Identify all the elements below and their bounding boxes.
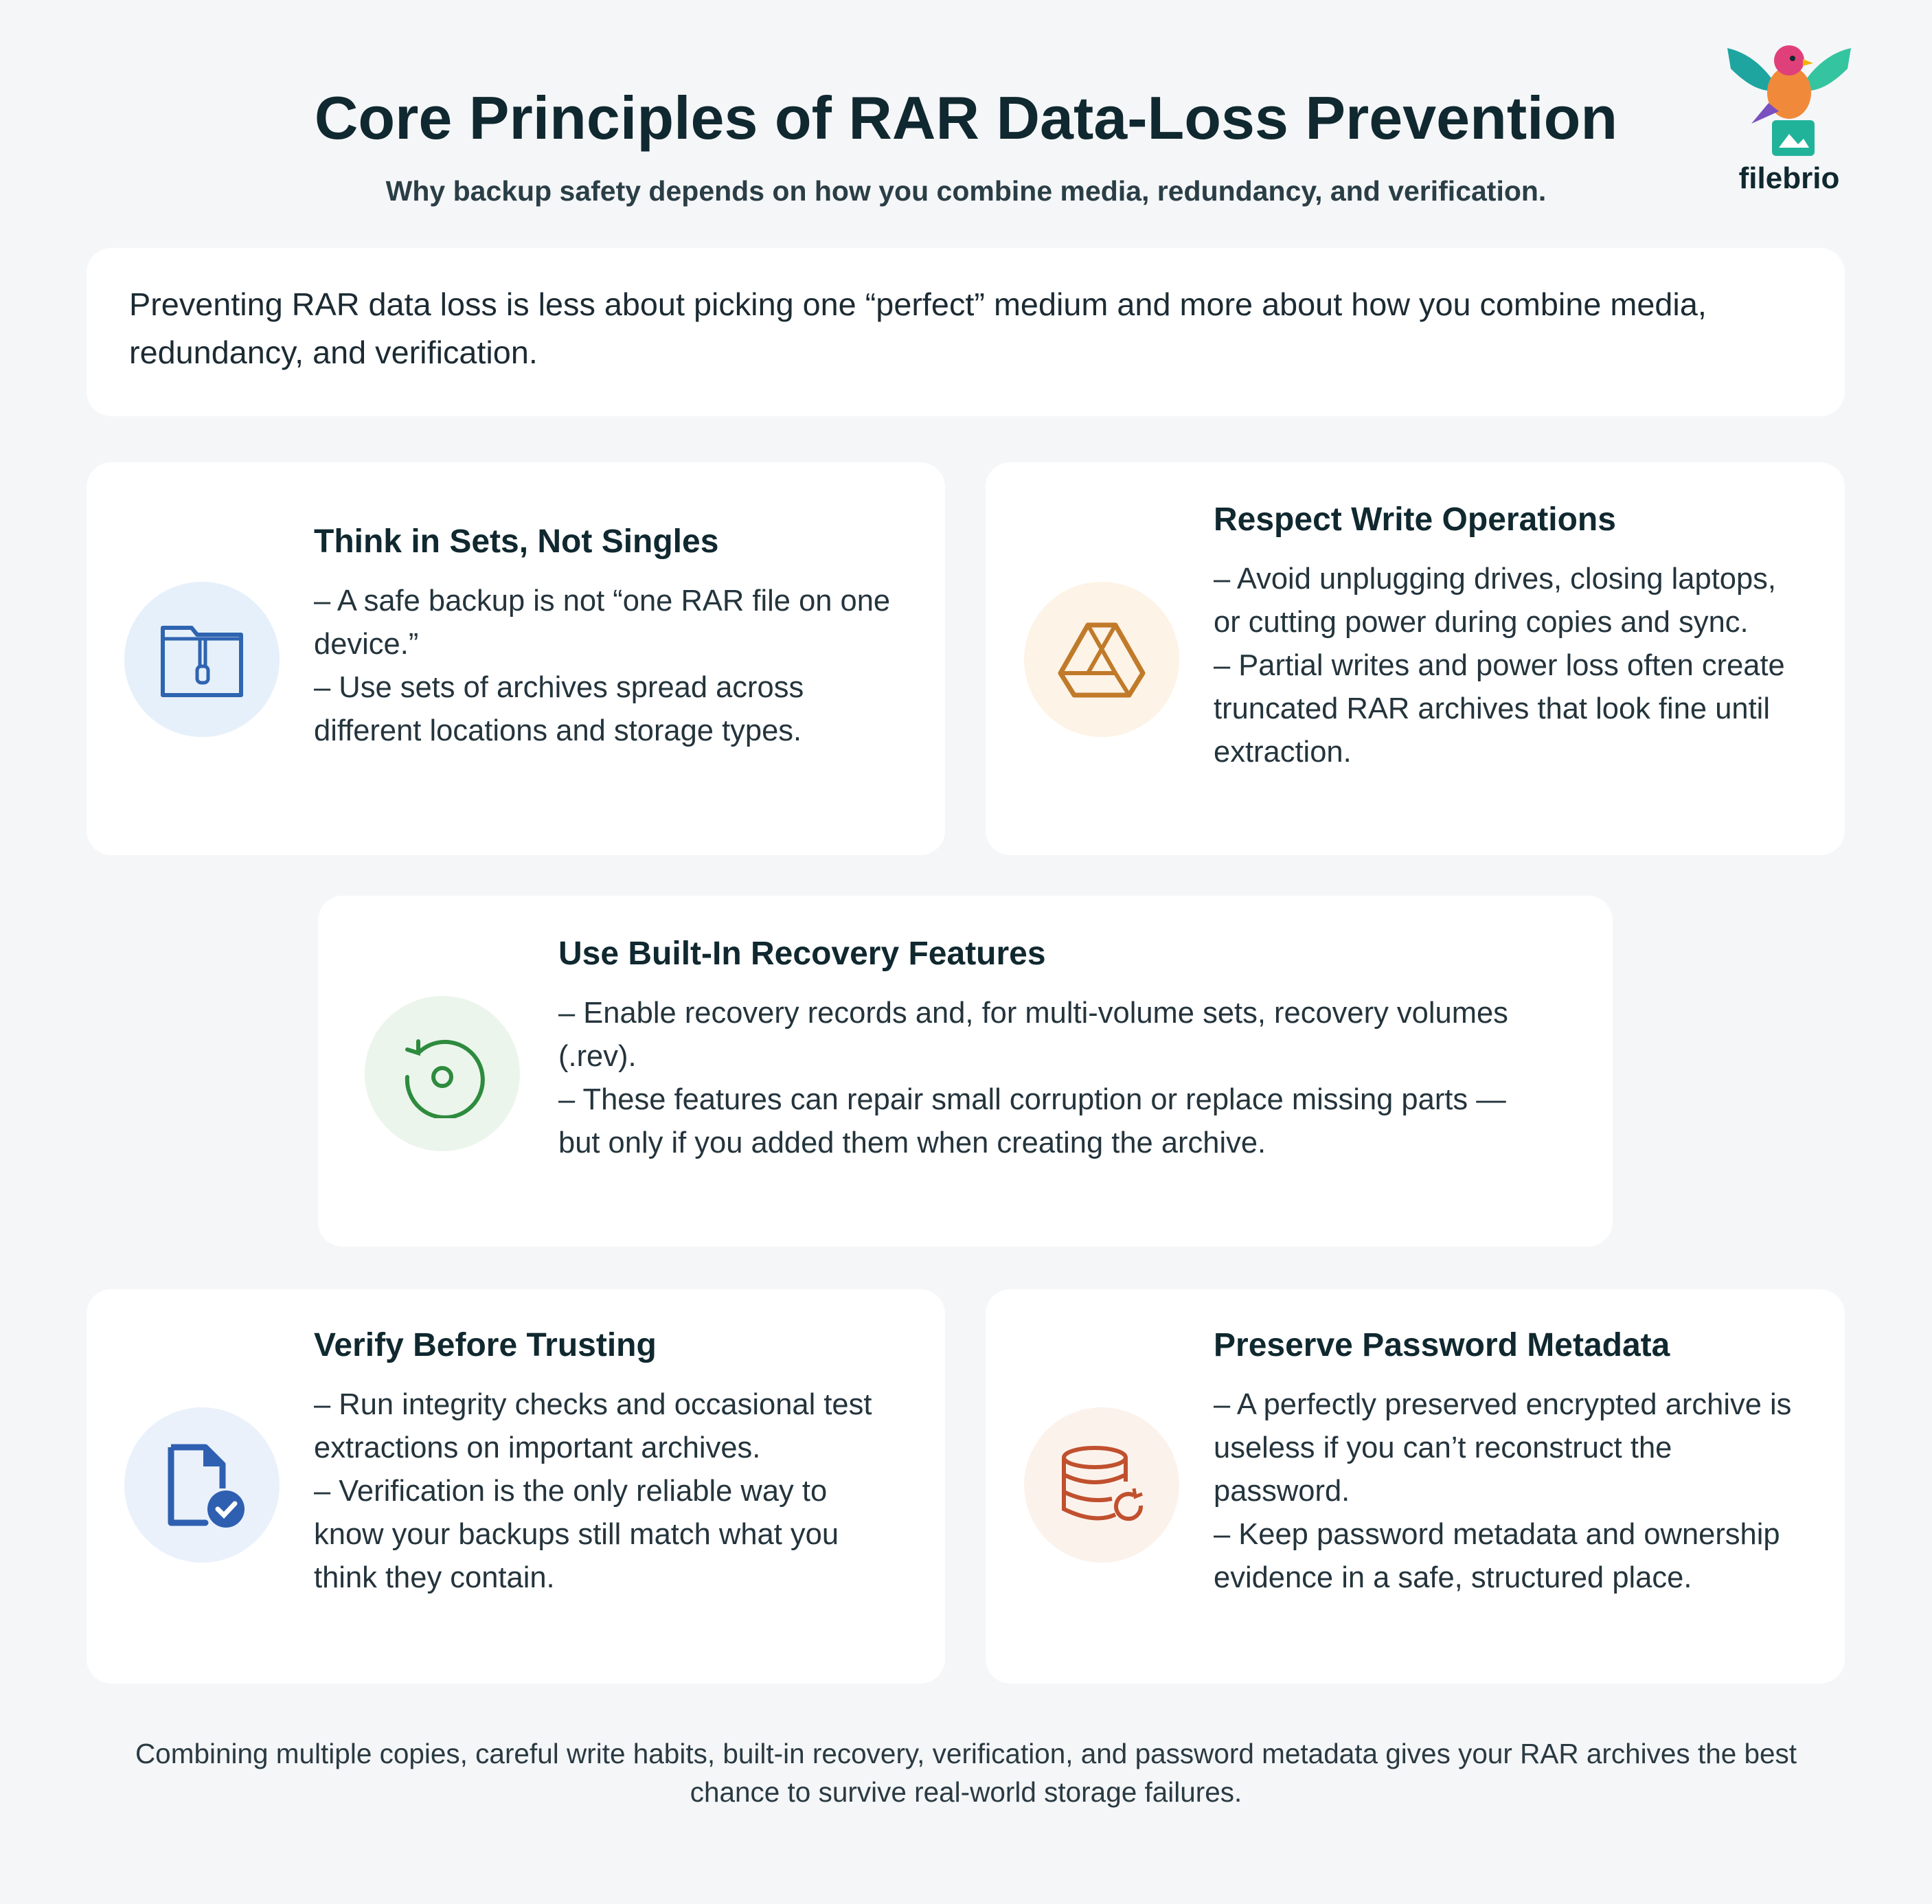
- text: recovery: but only if you added them when creating the archive.: [558, 1126, 1266, 1159]
- text: verify: – Run integrity checks and occasional test: [314, 1388, 872, 1421]
- text: verify: [314, 1327, 872, 1594]
- text: recovery: Use Built-In Recovery Features: [558, 936, 1046, 972]
- text: password: – Keep password metadata and ownership: [1214, 1518, 1780, 1551]
- text: respect write: extraction.: [1214, 736, 1352, 769]
- text: recovery: [558, 936, 1508, 1159]
- text: verify: Verify Before Trusting: [314, 1327, 657, 1363]
- text: think in sets: – A safe backup is not “one RAR file on one: [314, 585, 890, 617]
- text: respect write: – Partial writes and power loss often create: [1214, 649, 1785, 682]
- icon: zip folder: [124, 582, 280, 737]
- intro panel: redundancy, and verification.: [129, 335, 538, 370]
- panel: recovery features: [318, 896, 1613, 1247]
- text: think in sets: – Use sets of archives spread across: [314, 671, 804, 704]
- text: password: useless if you can’t reconstruct the: [1214, 1431, 1672, 1464]
- text: respect write: Respect Write Operations: [1214, 501, 1616, 538]
- text: respect write: truncated RAR archives that look fine until: [1214, 692, 1770, 725]
- footer text: Combining multiple copies, careful write habits, built-in recovery, verification, and password metadata gives your RAR archives the best: [135, 1738, 1797, 1769]
- text: password: password.: [1214, 1475, 1350, 1508]
- footer text: [135, 1738, 1797, 1808]
- text: verify: think they contain.: [314, 1561, 555, 1594]
- icon: drive triangle: [1024, 582, 1179, 737]
- text: password: [1214, 1327, 1791, 1594]
- text: verify: extractions on important archives.: [314, 1431, 760, 1464]
- panel: verify: [87, 1289, 945, 1684]
- icon: database: [1024, 1407, 1179, 1563]
- panel: password metadata: [986, 1289, 1845, 1684]
- text: password: evidence in a safe, structured place.: [1214, 1561, 1692, 1594]
- panel: think in sets: [87, 462, 945, 855]
- intro panel: Preventing RAR data loss is less about picking one “perfect” medium and more about how you combine media,: [129, 286, 1707, 322]
- icon: recovery arrow: [365, 996, 520, 1151]
- subtitle: Why backup safety depends on how you combine media, redundancy, and verification.: [386, 175, 1546, 207]
- text: recovery: – These features can repair small corruption or replace missing parts —: [558, 1083, 1506, 1116]
- text: respect write: – Avoid unplugging drives, closing laptops,: [1214, 563, 1776, 596]
- text: respect write: [1214, 501, 1785, 769]
- logo: filebrio: [1739, 161, 1839, 195]
- text: think in sets: Think in Sets, Not Singles: [314, 523, 718, 560]
- footer text: chance to survive real-world storage failures.: [690, 1776, 1242, 1808]
- intro panel: [87, 248, 1845, 416]
- text: recovery: – Enable recovery records and, for multi-volume sets, recovery volumes: [558, 997, 1508, 1030]
- text: respect write: or cutting power during copies and sync.: [1214, 606, 1749, 639]
- text: verify: – Verification is the only reliable way to: [314, 1475, 827, 1508]
- text: password: Preserve Password Metadata: [1214, 1327, 1670, 1363]
- text: verify: know your backups still match what you: [314, 1518, 839, 1551]
- panel: respect write: [986, 462, 1845, 855]
- text: think in sets: different locations and storage types.: [314, 714, 802, 747]
- text: recovery: (.rev).: [558, 1040, 637, 1073]
- icon: file check: [124, 1407, 280, 1563]
- text: password: – A perfectly preserved encrypted archive is: [1214, 1388, 1791, 1421]
- text: think in sets: [314, 523, 890, 747]
- text: think in sets: device.”: [314, 628, 418, 661]
- title: Core Principles of RAR Data-Loss Prevention: [315, 84, 1617, 152]
- logo: [1727, 45, 1851, 195]
